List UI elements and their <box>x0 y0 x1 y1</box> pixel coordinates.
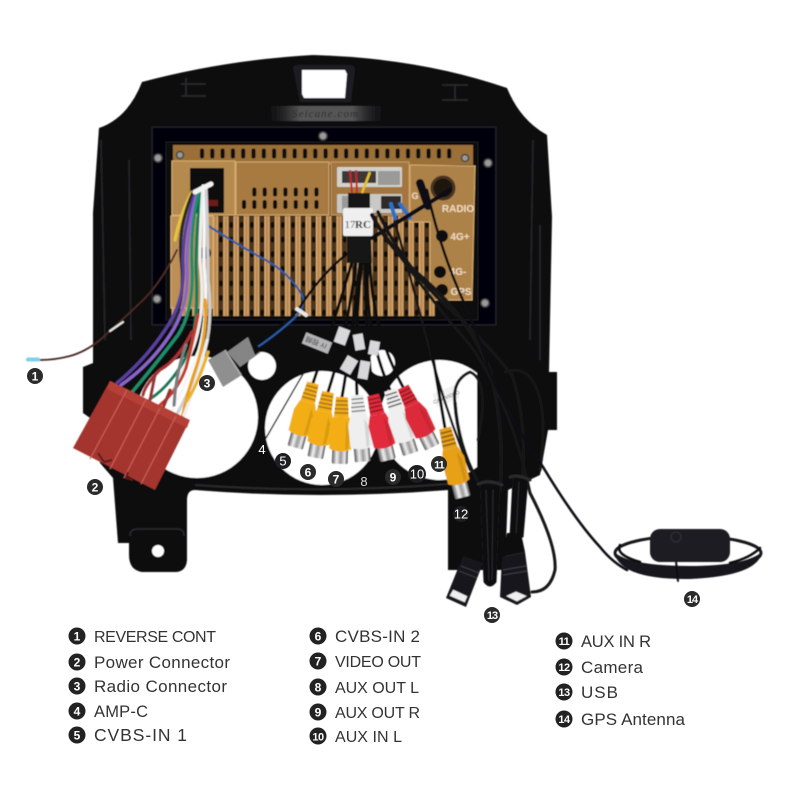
legend item 11: 11 <box>559 636 570 648</box>
cable tags <box>302 326 461 407</box>
legend item 4 <box>68 702 148 721</box>
RCA plug: CVBS-IN 1 <box>284 380 324 451</box>
legend item 14: GPS Antenna <box>581 710 686 729</box>
legend item 5: 5 <box>74 728 81 742</box>
port labels: 4G+ <box>450 232 470 243</box>
GPS coil <box>614 536 762 581</box>
RCA plug: VIDEO OUT <box>328 397 353 464</box>
callout 13 <box>484 607 500 623</box>
GPS antenna <box>427 190 762 581</box>
callout 6: 6 <box>305 466 312 480</box>
watermark: Seicane.com <box>292 108 358 120</box>
port labels: GPS <box>450 287 472 298</box>
port labels: G <box>411 191 419 201</box>
callout 9 <box>385 469 401 485</box>
legend column 1 <box>68 628 230 745</box>
callout 1 <box>27 368 43 384</box>
legend item 6: 6 <box>315 630 322 644</box>
port labels: RADIO <box>442 204 474 215</box>
RCA plug: AUX OUT R <box>362 392 399 463</box>
legend item 1: REVERSE CONT <box>94 629 216 646</box>
callout 10: 10 <box>410 466 424 482</box>
watermark <box>260 106 392 121</box>
legend item 9: AUX OUT R <box>335 705 420 722</box>
RCA cables <box>266 262 403 438</box>
legend item 12: 12 <box>558 662 570 674</box>
RCA plug: CVBS-IN 2 <box>304 390 339 460</box>
callout 8: 8 <box>360 474 368 489</box>
legend item 12: Camera <box>581 658 644 677</box>
callout 14: 14 <box>687 594 699 606</box>
callout 9: 9 <box>390 470 397 484</box>
callout 2 <box>87 479 103 495</box>
legend item 5: CVBS-IN 1 <box>94 725 187 745</box>
legend item 13 <box>556 683 618 702</box>
callout 3: 3 <box>204 376 211 390</box>
top clip window <box>293 65 355 102</box>
cable sleeve: 17 <box>344 219 356 231</box>
callout 14 <box>684 591 700 607</box>
callout 11 <box>431 456 447 472</box>
legend item 14: 14 <box>558 714 571 726</box>
camera cable <box>430 340 445 428</box>
legend item 11: AUX IN R <box>581 633 651 651</box>
legend item 7: 7 <box>315 654 322 668</box>
GPS cable <box>427 190 627 570</box>
legend item 7: VIDEO OUT <box>335 654 421 671</box>
legend item 13: 13 <box>558 687 570 699</box>
gold back panel <box>171 145 475 316</box>
callout numbers on photo <box>27 368 700 623</box>
RCA plug: AUX IN R <box>393 382 443 452</box>
callout 6 <box>300 464 316 480</box>
legend item 2: 2 <box>74 656 81 670</box>
legend item 8: AUX OUT L <box>335 680 419 697</box>
cable: reverse cont <box>28 250 177 360</box>
callout 1: 1 <box>32 370 39 384</box>
callout 12: 12 <box>454 506 468 522</box>
port labels <box>411 191 474 298</box>
power connector <box>73 381 190 490</box>
head unit product photo <box>28 55 762 607</box>
callout 2: 2 <box>92 480 99 494</box>
callout 7: 7 <box>333 472 340 486</box>
GPS receiver box <box>650 529 730 562</box>
legend item 10 <box>310 728 402 746</box>
inner bezel <box>152 127 496 325</box>
cable sleeve: RC <box>355 219 371 231</box>
legend item 3: Radio Connector <box>94 677 227 696</box>
USB left <box>446 543 484 607</box>
mounting holes <box>136 350 477 485</box>
callout 3 <box>199 375 215 391</box>
legend column 2 <box>310 627 421 746</box>
legend item 1: 1 <box>74 630 81 644</box>
USB right <box>500 533 531 605</box>
legend item 4: 4 <box>74 704 81 718</box>
legend item 2: Power Connector <box>94 653 230 672</box>
callout 11: 11 <box>434 460 445 472</box>
callout 13: 13 <box>487 610 498 622</box>
RCA plug: camera <box>434 425 474 500</box>
port labels: 4G- <box>450 267 466 278</box>
callout 5 <box>275 453 291 469</box>
screws <box>153 132 492 307</box>
callout 4: 4 <box>258 442 266 457</box>
USB connectors <box>446 533 531 607</box>
callout 7 <box>328 471 344 487</box>
radio connector <box>208 337 262 387</box>
legend item 9: 9 <box>315 706 322 720</box>
cable sleeve <box>343 170 373 263</box>
dash frame <box>83 55 557 572</box>
legend item 13: USB <box>581 683 618 702</box>
callout 10 <box>408 465 426 483</box>
legend item 10: AUX IN L <box>335 729 402 746</box>
legend item 3: 3 <box>74 680 81 694</box>
callout 5: 5 <box>279 454 287 468</box>
cable: blue and black radio wires <box>207 225 348 352</box>
loose cable bundle <box>372 212 555 592</box>
legend column 3 <box>556 632 686 729</box>
antenna sockets and short leads <box>372 177 454 238</box>
RCA plug: AUX IN L <box>379 386 422 457</box>
wire harness <box>117 184 211 418</box>
cable tags: CAM VIDEO <box>433 390 461 406</box>
legend item 10: 10 <box>312 732 324 744</box>
legend item 6: CVBS-IN 2 <box>335 627 420 646</box>
legend item 8: 8 <box>315 680 322 694</box>
RCA plug: AUX OUT L <box>346 394 374 463</box>
cable tags: IY 视频 <box>304 334 328 351</box>
legend item 4: AMP-C <box>94 703 148 721</box>
